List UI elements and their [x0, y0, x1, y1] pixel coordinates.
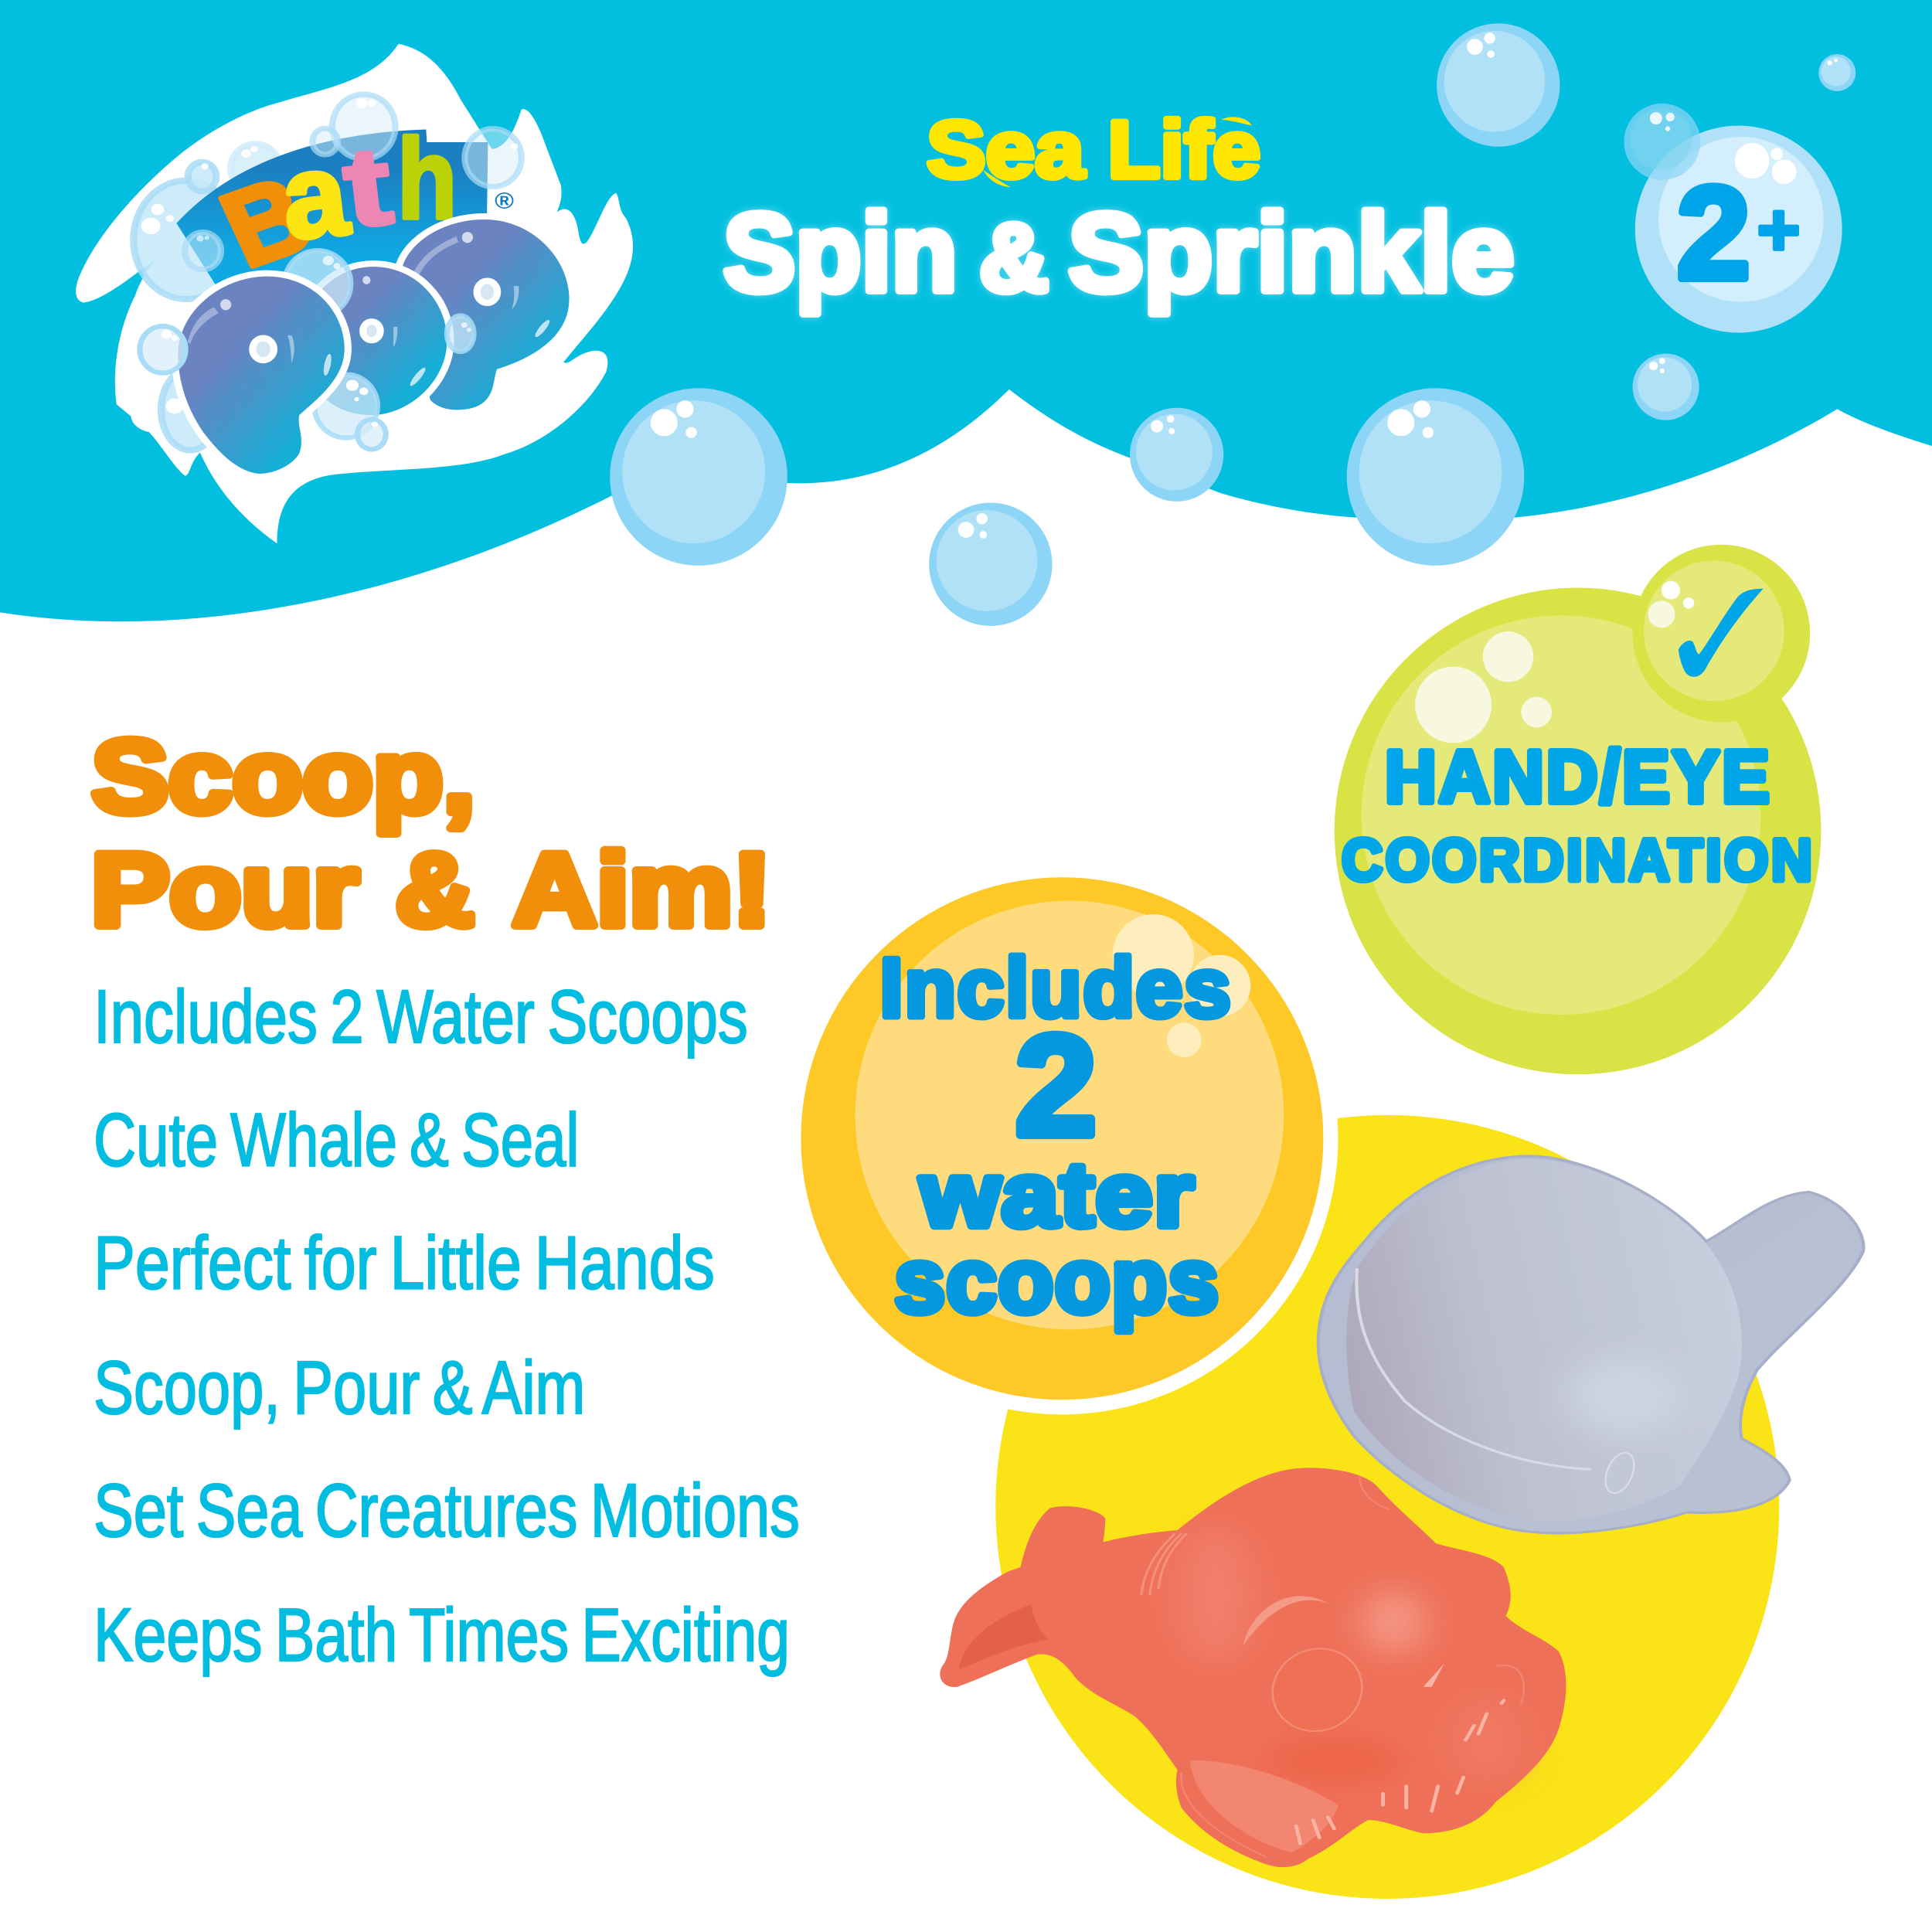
feature list: Set Sea Creatures Motions	[94, 1468, 800, 1553]
heading: Scoop, Pour & Aim: &	[396, 832, 474, 947]
logo word Bath: a	[275, 128, 355, 264]
header bubbles	[610, 23, 1855, 626]
badge text: Includes	[879, 940, 1232, 1034]
tick bubble	[1633, 545, 1810, 722]
badge text: COORDINATION	[1342, 828, 1815, 893]
small bubble over badge	[1624, 104, 1700, 180]
badge: includes 2 water scoops	[786, 862, 1338, 1414]
whale dome	[1346, 1159, 1742, 1522]
header wave background	[0, 0, 1932, 621]
logo word Bath: h	[397, 116, 457, 243]
product title: Sprinkle	[1068, 191, 1515, 315]
product range title: Sea Life: Sea	[927, 105, 1086, 196]
bubble: below wave	[929, 503, 1053, 626]
bubble: wave centre	[1130, 408, 1223, 502]
logo bubbles over droplets	[284, 250, 474, 438]
logo word Bath: B	[204, 153, 329, 290]
seal shading	[1178, 1527, 1525, 1784]
heading: Scoop, Pour & Aim: Aim!	[512, 832, 771, 947]
heading: Scoop, Pour & Aim: Scoop,	[92, 719, 475, 835]
feature list: Perfect for Little Hands	[94, 1221, 715, 1305]
badge text	[879, 940, 1232, 1332]
bubble: lower right	[1633, 354, 1699, 420]
seal flipper	[1190, 1760, 1338, 1852]
logo droplet glints	[188, 232, 552, 387]
badge text: 2	[1015, 1006, 1097, 1165]
logo droplet back	[400, 216, 573, 413]
seal eye	[1267, 1645, 1368, 1734]
seal toes	[1296, 1700, 1504, 1844]
logo registered mark: ®	[495, 188, 514, 214]
logo white splash	[76, 44, 633, 543]
heading: Scoop, Pour & Aim: Pour	[91, 832, 359, 947]
age badge 2+: +	[1757, 189, 1800, 271]
product title	[723, 191, 1515, 315]
toy: seal scoop	[940, 1468, 1566, 1867]
feature list: Includes 2 Water Scoops	[94, 975, 748, 1059]
logo blue banner	[176, 129, 488, 285]
logo droplet middle	[299, 264, 451, 418]
logo bubbles behind	[134, 144, 280, 451]
whale outline and tail	[1318, 1156, 1863, 1533]
heading: Scoop, Pour & Aim	[91, 719, 771, 947]
toy: whale scoop	[1318, 1156, 1863, 1533]
seal body	[940, 1468, 1566, 1867]
logo word Bath	[204, 116, 457, 290]
bubble: wave right	[1347, 388, 1524, 566]
logo bubble highlights	[141, 98, 518, 427]
product title: Spin	[723, 191, 957, 315]
logo: Bath brand splash	[76, 44, 633, 543]
age badge 2+: 2	[1677, 160, 1750, 307]
whale highlight	[1566, 1357, 1681, 1436]
product title: &	[980, 204, 1049, 311]
badge text: scoops	[895, 1230, 1219, 1332]
yellow backing circle	[995, 1115, 1779, 1899]
seal brow	[1243, 1596, 1330, 1645]
product range title: Sea Life	[927, 105, 1260, 196]
badge text: water	[920, 1144, 1196, 1246]
logo droplet eyes	[253, 281, 498, 360]
logo front bubbles	[140, 326, 386, 449]
logo droplet front	[175, 274, 348, 477]
badge text	[1342, 736, 1815, 893]
bubble: top right small	[1818, 54, 1855, 91]
age badge 2+	[1624, 104, 1842, 332]
bubble: wave left	[610, 388, 787, 566]
feature list: Cute Whale & Seal	[94, 1097, 579, 1182]
feature list	[94, 975, 800, 1677]
seal tail shadow	[959, 1604, 1048, 1669]
badge: hand/eye coordination	[1335, 545, 1821, 1074]
seal neck ridges	[1141, 1533, 1187, 1595]
icon: check mark	[1679, 589, 1764, 677]
product range title: Sea Life: Life	[1107, 105, 1260, 196]
feature list: Keeps Bath Times Exciting	[94, 1593, 790, 1677]
badge text: HAND/EYE	[1385, 736, 1772, 818]
bubble: top	[1437, 23, 1560, 147]
logo bubbles over banner	[185, 94, 522, 270]
logo word Bath: t	[337, 124, 398, 250]
feature list: Scoop, Pour & Aim	[94, 1345, 585, 1430]
